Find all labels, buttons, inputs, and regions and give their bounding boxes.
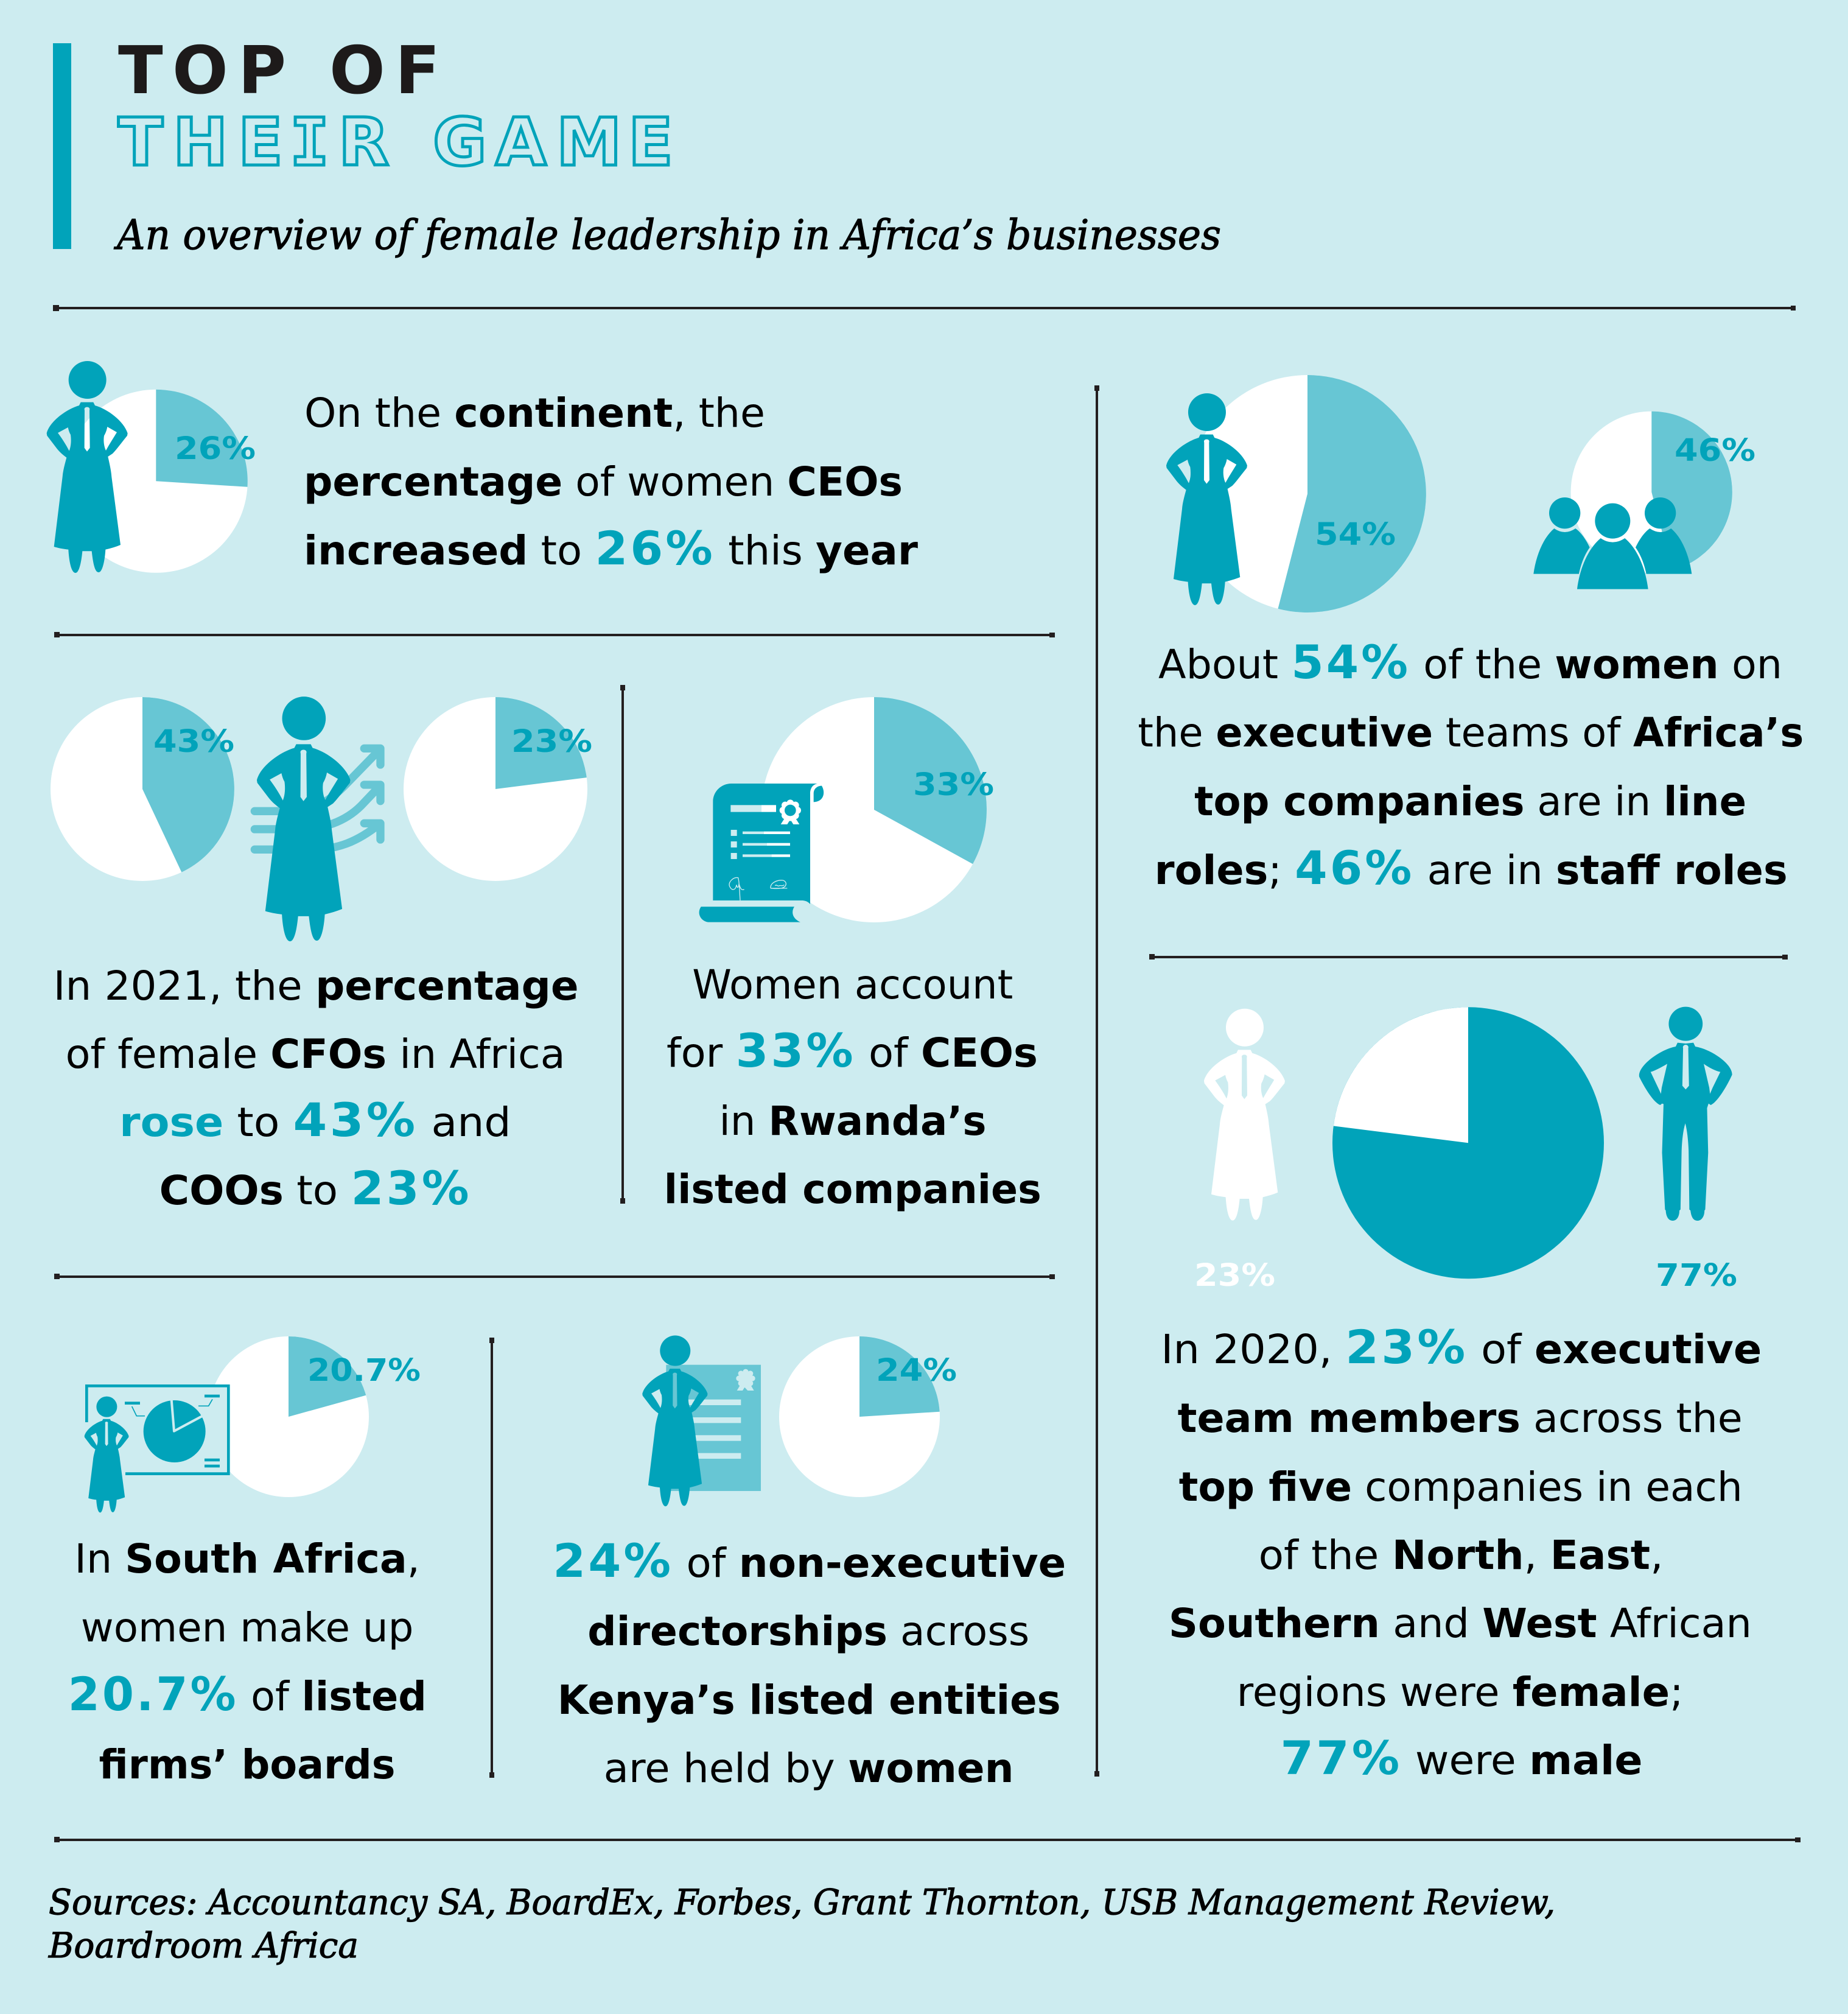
- icon: presentation board: [86, 1386, 228, 1474]
- text: South Africa: 20.7% of listed: [68, 1667, 427, 1721]
- text: executive teams: In 2020, 23% of executive: [1161, 1320, 1762, 1374]
- icon: man: [1639, 1007, 1732, 1221]
- pie chart: 46%: [1571, 412, 1732, 573]
- icon: document: [666, 1365, 761, 1491]
- text: line and staff roles: [1138, 635, 1804, 895]
- panel: executive team gender split: [1161, 1007, 1762, 1785]
- text: Kenya: 24% of non-executive: [553, 1534, 1066, 1588]
- text: South Africa: women make up: [81, 1604, 413, 1651]
- panel: line and staff roles: [1138, 375, 1804, 895]
- text: Kenya: [553, 1534, 1066, 1792]
- title: I: [290, 105, 329, 181]
- title accent bar: [53, 43, 71, 249]
- icon: woman: [642, 1336, 707, 1506]
- pie chart: 43%: [51, 697, 234, 881]
- label: 23%: 23%: [1194, 1258, 1275, 1294]
- icon: group of three people: [1533, 492, 1692, 589]
- text: CFOs: rose to 43% and: [119, 1093, 511, 1147]
- text: executive teams: 77% were male: [1281, 1731, 1642, 1785]
- text: executive teams: team members across the: [1178, 1395, 1743, 1442]
- text: Rwanda: listed companies: [664, 1166, 1041, 1213]
- text: Kenya: are held by women: [604, 1745, 1014, 1792]
- icon: woman: [1166, 393, 1247, 605]
- label: 46%: 46%: [1675, 433, 1755, 469]
- text: Kenya: directorships across: [587, 1608, 1029, 1655]
- label: 77%: 77%: [1656, 1258, 1737, 1294]
- text: Rwanda: Women account: [692, 961, 1013, 1008]
- panel: women CEOs 26%: [47, 361, 918, 575]
- pie chart: 54%: [1189, 375, 1426, 612]
- panel: South Africa 20.7%: [68, 1336, 427, 1788]
- title: E: [628, 105, 673, 181]
- text: Rwanda: for 33% of CEOs: [667, 1023, 1038, 1078]
- text: Rwanda: [664, 961, 1041, 1213]
- title: G: [433, 105, 487, 181]
- label: 33%: 33%: [913, 767, 994, 803]
- label: 20.7%: 20.7%: [307, 1353, 421, 1389]
- pie chart: 24%: [779, 1336, 940, 1497]
- title: THE: [118, 105, 283, 181]
- text: continent CEOs: increased to 26% this year: [304, 521, 918, 575]
- text: CFOs: In 2021, the percentage: [54, 963, 579, 1009]
- icon: woman: [47, 361, 128, 573]
- text: South Africa: In South Africa,: [74, 1535, 420, 1582]
- label: 54%: 54%: [1315, 517, 1396, 553]
- icon: certificate scroll: [699, 784, 824, 922]
- title: TOP OF: [118, 33, 440, 109]
- icon: woman white: [1204, 1009, 1285, 1221]
- text: CFOs: of female CFOs in Africa: [66, 1031, 565, 1078]
- text: line and staff roles: top companies are in line: [1194, 778, 1746, 825]
- text: South Africa: firms’ boards: [99, 1741, 396, 1788]
- text: executive teams: regions were female;: [1237, 1669, 1684, 1716]
- title: M: [556, 105, 621, 181]
- label: 26%: 26%: [175, 431, 256, 467]
- label: 43%: 43%: [153, 724, 234, 760]
- text: line and staff roles: the executive teams of Africa’s: [1138, 709, 1804, 756]
- sources: Boardroom Africa: [48, 1926, 359, 1966]
- label: 24%: 24%: [876, 1353, 957, 1389]
- pie chart: 20.7%: [208, 1336, 369, 1497]
- text: line and staff roles: About 54% of the women on: [1158, 635, 1782, 689]
- text: executive teams: Southern and West African: [1169, 1600, 1752, 1647]
- subtitle: An overview of female leadership in Africa’s businesses: [113, 211, 1221, 259]
- text: Rwanda: in Rwanda’s: [719, 1098, 986, 1145]
- icon: woman: [85, 1397, 129, 1512]
- panel: Kenya 24%: [553, 1336, 1066, 1792]
- text: executive teams: of the North, East,: [1259, 1532, 1664, 1579]
- text: continent CEOs: percentage of women CEOs: [304, 458, 903, 505]
- text: Kenya: Kenya’s listed entities: [558, 1677, 1061, 1724]
- label: 23%: 23%: [511, 724, 592, 760]
- divider rules: [53, 305, 1801, 1842]
- pie chart: 26%: [65, 390, 248, 573]
- text: continent CEOs: [304, 390, 918, 575]
- sources: Sources: Accountancy SA, BoardEx, Forbes, Grant Thornton, USB Management Review,: [49, 1882, 1555, 1923]
- text: executive teams: top five companies in each: [1179, 1464, 1743, 1510]
- icon: woman: [257, 696, 351, 941]
- text: CFOs: [54, 963, 579, 1215]
- icon: rising arrows: [254, 748, 380, 849]
- text: CFOs: COOs to 23%: [159, 1161, 472, 1215]
- panel: Rwanda 33%: [664, 697, 1041, 1213]
- panel: CFOs and COOs: [51, 696, 592, 1215]
- text: line and staff roles: roles; 46% are in staff roles: [1155, 841, 1788, 895]
- text: executive teams: [1161, 1320, 1762, 1785]
- title: [118, 33, 673, 181]
- pie chart: 23%: [404, 697, 587, 881]
- text: continent CEOs: On the continent, the: [304, 390, 765, 437]
- pie chart: 33%: [761, 697, 987, 922]
- title: A: [495, 105, 547, 181]
- sources: [48, 1882, 1555, 1966]
- pie chart: 23% female, 77% male: [1332, 1007, 1604, 1279]
- text: South Africa: [68, 1535, 427, 1788]
- title: R: [338, 105, 389, 181]
